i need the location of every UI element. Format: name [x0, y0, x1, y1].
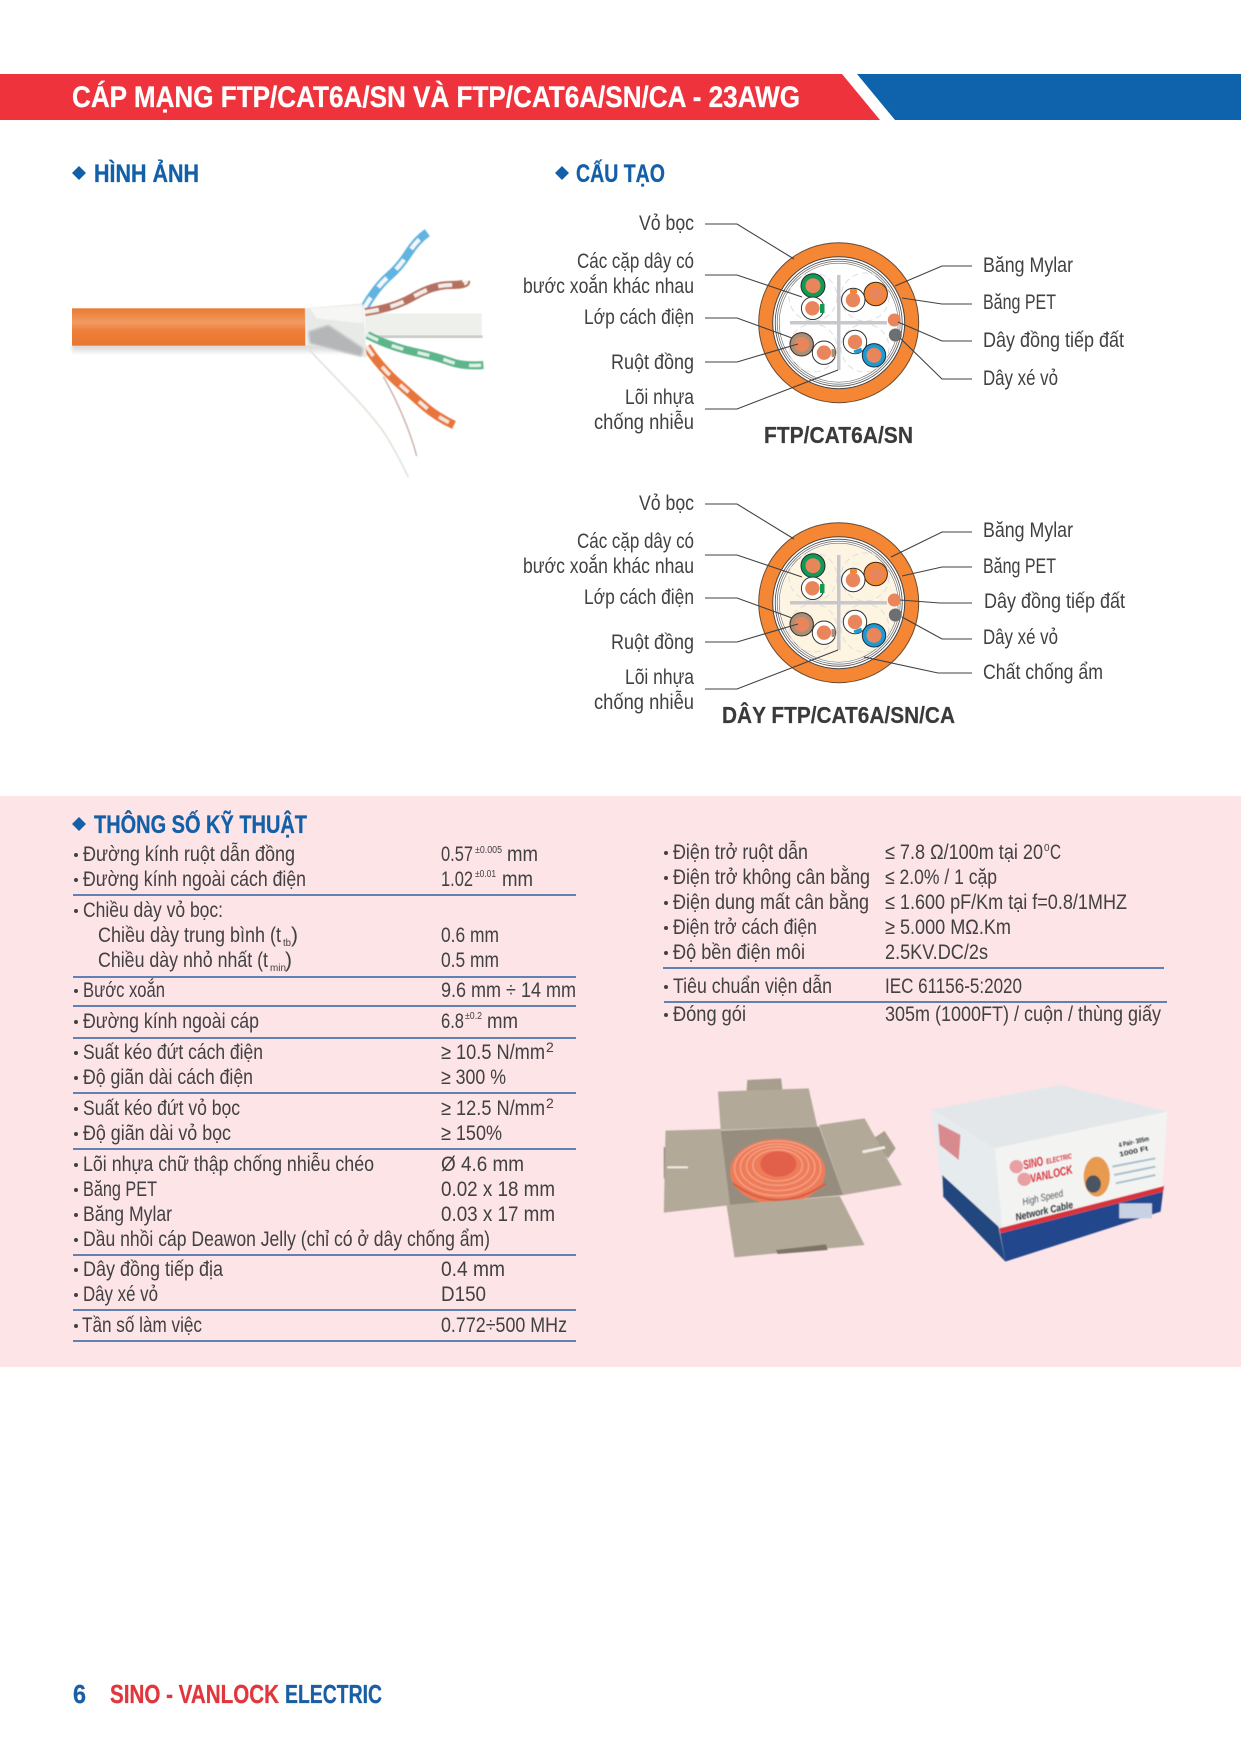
row: bước xoắn — [74, 979, 576, 1002]
left callout labels: bước xoắn khác nhau — [523, 555, 694, 578]
right callout labels: Băng PET — [983, 555, 1056, 578]
row: dây đồng tiếp địa: 0.4 mm — [441, 1258, 505, 1281]
right callout labels: Băng Mylar — [983, 519, 1073, 542]
left callout labels: Lớp cách điện — [584, 306, 694, 329]
row: điện trở ruột dẫn — [664, 841, 1061, 864]
footer: page number and brand: ELECTRIC — [285, 1679, 382, 1709]
row: điện trở cách điện — [664, 916, 1011, 939]
right callout labels: Dây đồng tiếp đất — [983, 329, 1124, 352]
left callout labels: chống nhiễu — [594, 411, 694, 434]
row: chiều dày nhỏ nhất: min — [270, 963, 286, 974]
right callout labels: Băng Mylar — [983, 254, 1073, 277]
heading: hình ảnh: HÌNH ẢNH — [94, 158, 199, 188]
left callout labels: Các cặp dây có — [577, 250, 694, 273]
heading: thông số kỹ thuật — [72, 809, 307, 839]
heading: thông số kỹ thuật: THÔNG SỐ KỸ THUẬT — [94, 809, 307, 839]
box print: Network Cable — [1015, 1200, 1074, 1224]
row: chiều dày vỏ bọc: Chiều dày vỏ bọc: — [83, 899, 223, 922]
row: độ giãn dài cách điện — [74, 1066, 506, 1089]
right callout labels: Dây xé vỏ — [983, 367, 1058, 390]
row: dây đồng tiếp địa: Dây đồng tiếp địa — [83, 1258, 223, 1281]
row: đường kính ruột dẫn đồng: mm — [507, 843, 538, 866]
row: tiêu chuẩn viện dẫn — [664, 975, 1022, 998]
row: tiêu chuẩn viện dẫn: Tiêu chuẩn viện dẫn — [673, 975, 832, 998]
row: băng Mylar — [74, 1203, 555, 1226]
box print: ELECTRIC — [1045, 1151, 1073, 1166]
row: độ giãn dài vỏ bọc: ≥ 150% — [441, 1122, 502, 1145]
row: độ giãn dài vỏ bọc: Độ giãn dài vỏ bọc — [83, 1122, 231, 1145]
box print — [1015, 1136, 1150, 1224]
row: suất kéo đứt vỏ bọc: Suất kéo đứt vỏ bọc — [83, 1097, 240, 1120]
left callout labels — [523, 212, 694, 434]
heading: hình ảnh — [72, 158, 199, 188]
photo: closed carton box — [931, 1085, 1168, 1262]
row: bước xoắn: 9.6 mm ÷ 14 mm — [441, 979, 576, 1002]
cable cross-section — [759, 523, 919, 683]
left callout labels: Ruột đồng — [611, 631, 694, 654]
row: đường kính ngoài cách điện: Đường kính ngoài cách điện — [83, 868, 306, 891]
row: suất kéo đứt cách điện: 2 — [546, 1039, 554, 1055]
row: chiều dày trung bình: Chiều dày trung bình (t — [98, 924, 281, 947]
row: điện trở ruột dẫn: C — [1050, 841, 1061, 864]
left callout labels — [523, 492, 694, 714]
row: đường kính ruột dẫn đồng: 0.57 — [441, 843, 473, 866]
row: điện trở ruột dẫn: 0 — [1044, 843, 1050, 854]
right callout labels: Băng PET — [983, 291, 1056, 314]
row: đường kính ngoài cáp: ±0.2 — [465, 1011, 482, 1022]
row: chiều dày trung bình: ) — [291, 924, 298, 947]
table: right specifications — [663, 841, 1167, 1026]
title banner: CÁP MẠNG FTP/CAT6A/SN VÀ FTP/CAT6A/SN/CA - 23AWG — [72, 80, 800, 114]
row: suất kéo đứt vỏ bọc — [74, 1095, 554, 1120]
left callout labels: chống nhiễu — [594, 691, 694, 714]
right callout labels: Chất chống ẩm — [983, 661, 1103, 684]
row: dầu nhồi cáp: Dầu nhồi cáp Deawon Jelly (chỉ có ở dây chống ẩm) — [83, 1228, 490, 1251]
row: đóng gói: Đóng gói — [673, 1003, 746, 1026]
title banner — [0, 74, 1241, 120]
left callout labels: bước xoắn khác nhau — [523, 275, 694, 298]
footer: page number and brand: 6 — [73, 1679, 86, 1709]
row: lõi nhựa chữ thập: Lõi nhựa chữ thập chống nhiễu chéo — [83, 1153, 374, 1176]
row: dây xé vỏ — [74, 1283, 486, 1306]
box print: High Speed — [1021, 1189, 1065, 1208]
box print: VANLOCK — [1029, 1163, 1075, 1186]
row: điện trở không cân bằng — [664, 866, 997, 889]
caption: FTP/CAT6A/SN — [764, 422, 913, 448]
row: điện dung mất cân bằng — [664, 891, 1127, 914]
row: điện dung mất cân bằng: Điện dung mất cân bằng — [673, 891, 869, 914]
row: đường kính ngoài cách điện: 1.02 — [441, 868, 473, 891]
row: đường kính ruột dẫn đồng: Đường kính ruột dẫn đồng — [83, 843, 295, 866]
right callout labels: Dây xé vỏ — [983, 626, 1058, 649]
photo: open carton with cable coil — [664, 1078, 902, 1257]
right callout labels — [983, 519, 1125, 684]
row: chiều dày nhỏ nhất: 0.5 mm — [441, 949, 499, 972]
row: đường kính ngoài cáp: Đường kính ngoài cáp — [83, 1010, 259, 1033]
row: băng PET: 0.02 x 18 mm — [441, 1178, 555, 1201]
caption: DÂY FTP/CAT6A/SN/CA — [722, 701, 955, 728]
row: độ giãn dài cách điện: Độ giãn dài cách điện — [83, 1066, 253, 1089]
row: điện trở cách điện: Điện trở cách điện — [673, 916, 817, 939]
row: điện trở cách điện: ≥ 5.000 MΩ.Km — [885, 916, 1011, 939]
row: chiều dày nhỏ nhất: Chiều dày nhỏ nhất (t — [98, 949, 268, 972]
leader lines — [705, 224, 972, 409]
footer: page number and brand: SINO - VANLOCK — [110, 1679, 279, 1709]
row: suất kéo đứt vỏ bọc: 2 — [546, 1095, 554, 1111]
row: đóng gói: 305m (1000FT) / cuộn / thùng giấy — [885, 1003, 1161, 1026]
left callout labels: Vỏ bọc — [639, 492, 694, 515]
photo: stripped cable — [72, 233, 483, 477]
footer: page number and brand — [73, 1679, 382, 1709]
box print: 4 Pair- 305m — [1118, 1136, 1150, 1149]
row: suất kéo đứt vỏ bọc: ≥ 12.5 N/mm — [441, 1097, 545, 1120]
row: đường kính ngoài cách điện: ±0.01 — [475, 869, 496, 880]
cable cross-section — [759, 243, 919, 403]
row: băng Mylar: 0.03 x 17 mm — [441, 1203, 555, 1226]
row: dây xé vỏ: D150 — [441, 1283, 486, 1306]
row: độ bền điện môi: Độ bền điện môi — [673, 941, 805, 964]
row: độ giãn dài vỏ bọc — [74, 1122, 502, 1145]
row: đóng gói — [664, 1003, 1161, 1026]
row: điện trở không cân bằng: ≤ 2.0% / 1 cặp — [885, 866, 997, 889]
heading: cấu tạo — [555, 159, 665, 188]
left callout labels: Vỏ bọc — [639, 212, 694, 235]
row: độ giãn dài cách điện: ≥ 300 % — [441, 1066, 506, 1089]
row: đường kính ngoài cáp: mm — [487, 1010, 518, 1033]
row: suất kéo đứt cách điện — [74, 1039, 554, 1064]
table: left specifications — [73, 843, 576, 1341]
row: điện trở ruột dẫn: ≤ 7.8 Ω/100m tại 20 — [885, 841, 1043, 864]
row: chiều dày trung bình — [98, 924, 499, 949]
row: dây đồng tiếp địa — [74, 1258, 505, 1281]
row: chiều dày trung bình: 0.6 mm — [441, 924, 499, 947]
panel: FTP/CAT6A/SN cross-section diagram — [523, 212, 1124, 448]
row: độ bền điện môi — [664, 941, 988, 964]
row: suất kéo đứt cách điện: Suất kéo đứt cách điện — [83, 1041, 263, 1064]
row: đường kính ruột dẫn đồng — [74, 843, 538, 866]
box print: 1000 Ft — [1119, 1145, 1150, 1159]
row: chiều dày nhỏ nhất — [98, 949, 499, 974]
left callout labels: Ruột đồng — [611, 351, 694, 374]
row: chiều dày nhỏ nhất: ) — [285, 949, 292, 972]
row: điện trở ruột dẫn: Điện trở ruột dẫn — [673, 841, 808, 864]
leader lines — [705, 504, 972, 689]
row: băng PET — [74, 1178, 555, 1201]
row: băng Mylar: Băng Mylar — [83, 1203, 172, 1226]
row: băng PET: Băng PET — [83, 1178, 157, 1201]
right callout labels — [983, 254, 1124, 390]
panel: DÂY FTP/CAT6A/SN/CA cross-section diagram — [523, 492, 1125, 728]
row: đường kính ngoài cách điện — [74, 868, 533, 891]
left callout labels: Các cặp dây có — [577, 530, 694, 553]
row: độ bền điện môi: 2.5KV.DC/2s — [885, 941, 988, 964]
row: tần số làm việc: 0.772÷500 MHz — [441, 1314, 567, 1337]
box print: SINO — [1022, 1153, 1045, 1172]
left callout labels: Lõi nhựa — [625, 666, 694, 689]
row: bước xoắn: Bước xoắn — [83, 979, 165, 1002]
row: tần số làm việc: Tần số làm việc — [82, 1314, 202, 1337]
row: đường kính ruột dẫn đồng: ±0.005 — [475, 845, 502, 856]
row: tiêu chuẩn viện dẫn: IEC 61156-5:2020 — [885, 975, 1022, 998]
left callout labels: Lõi nhựa — [625, 386, 694, 409]
row: suất kéo đứt cách điện: ≥ 10.5 N/mm — [441, 1041, 545, 1064]
row: đường kính ngoài cách điện: mm — [502, 868, 533, 891]
right callout labels: Dây đồng tiếp đất — [984, 590, 1125, 613]
row: điện dung mất cân bằng: ≤ 1.600 pF/Km tại f=0.8/1MHZ — [885, 891, 1127, 914]
row: dây xé vỏ: Dây xé vỏ — [83, 1283, 158, 1306]
row: đường kính ngoài cáp: 6.8 — [441, 1010, 464, 1033]
row: lõi nhựa chữ thập: Ø 4.6 mm — [441, 1153, 524, 1176]
panel: specifications band — [0, 796, 1241, 1367]
row: tần số làm việc — [74, 1314, 567, 1337]
row: chiều dày trung bình: tb — [283, 938, 291, 949]
row: điện trở không cân bằng: Điện trở không cân bằng — [673, 866, 870, 889]
left callout labels: Lớp cách điện — [584, 586, 694, 609]
row: đường kính ngoài cáp — [74, 1010, 518, 1033]
heading: cấu tạo: CẤU TẠO — [576, 159, 665, 188]
